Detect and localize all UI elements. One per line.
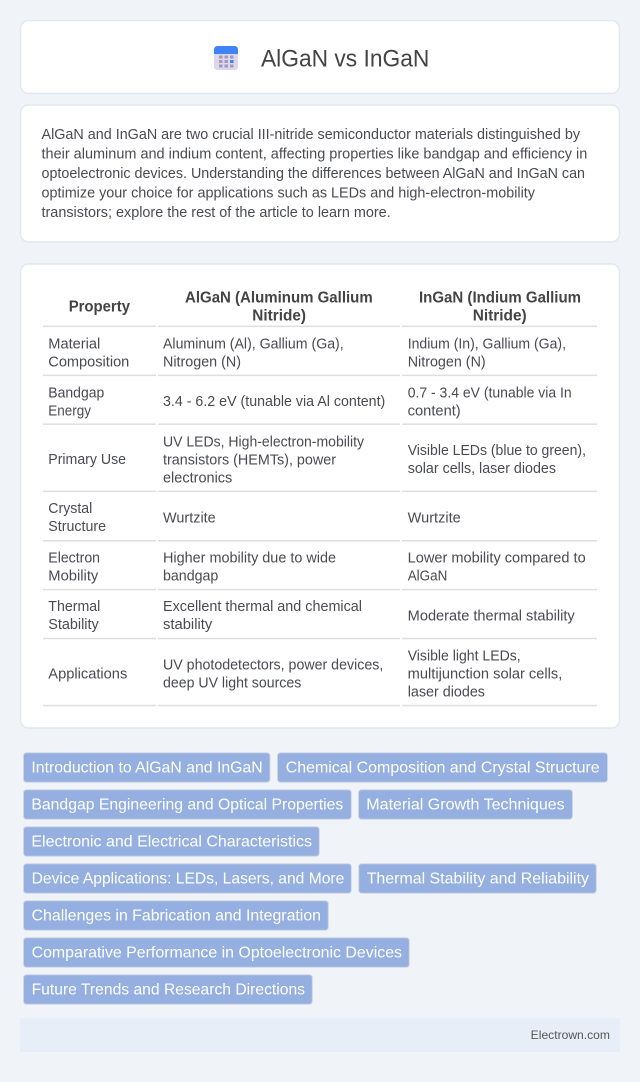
row: material composition: Nitrogen (N) xyxy=(408,354,486,370)
tag: comparative performance xyxy=(24,938,409,967)
row: electron mobility: Higher mobility due to wide xyxy=(163,550,336,566)
row: applications: Visible light LEDs, xyxy=(408,648,521,664)
text block: intro paragraph xyxy=(42,127,587,221)
row: thermal stability: Stability xyxy=(48,617,100,633)
table header row: Nitride) xyxy=(473,308,527,324)
table header row: AlGaN (Aluminum Gallium xyxy=(185,289,373,306)
row: thermal stability: stability xyxy=(163,617,213,633)
row: primary use: Primary Use xyxy=(48,452,126,468)
tag: device applications xyxy=(24,864,351,893)
tag: chemical composition xyxy=(278,753,608,782)
row: material composition: Indium (In), Gallium (Ga), xyxy=(408,336,566,352)
row: electron mobility: bandgap xyxy=(163,568,218,584)
tag: comparative performance: Comparative Performance in Optoelectronic Devices xyxy=(32,945,402,962)
row: thermal stability: Thermal xyxy=(48,599,100,615)
row: electron mobility xyxy=(48,550,586,584)
row: crystal structure: Wurtzite xyxy=(408,510,461,526)
row: applications: deep UV light sources xyxy=(163,675,301,691)
tag: bandgap engineering: Bandgap Engineering and Optical Properties xyxy=(31,797,343,814)
footer xyxy=(20,1018,620,1052)
row: primary use: transistors (HEMTs), power xyxy=(163,452,336,468)
row: crystal structure: Crystal xyxy=(48,501,92,517)
row: primary use xyxy=(48,435,586,486)
tag: chemical composition: Chemical Composition and Crystal Structure xyxy=(286,760,600,777)
tag: future trends xyxy=(24,975,312,1004)
row: applications: UV photodetectors, power devices, xyxy=(163,657,383,673)
row: thermal stability: Moderate thermal stability xyxy=(408,608,576,624)
row: material composition: Material xyxy=(48,336,100,352)
tag: introduction: Introduction to AlGaN and InGaN xyxy=(31,760,263,777)
tag: electronic characteristics: Electronic and Electrical Characteristics xyxy=(31,834,312,851)
panel: header xyxy=(20,20,620,94)
tag: material growth xyxy=(358,790,572,819)
row: bandgap energy xyxy=(48,385,572,419)
row: thermal stability xyxy=(48,599,576,633)
tag: introduction xyxy=(24,753,270,782)
tag: material growth: Material Growth Techniques xyxy=(366,797,565,814)
text block: intro paragraph: transistors; explore the rest of the article to learn more. xyxy=(42,205,391,221)
row: material composition xyxy=(48,336,566,370)
tag: thermal stability: Thermal Stability and Reliability xyxy=(367,871,589,888)
row: material composition: Aluminum (Al), Gallium (Ga), xyxy=(163,336,344,352)
text block: intro paragraph: optoelectronic devices. Understanding the differences between AlGaN and InGaN can xyxy=(42,166,585,182)
row: electron mobility: AlGaN xyxy=(408,568,447,584)
text block: intro paragraph: optimize your choice for applications such as LEDs and high-electron-mobility xyxy=(42,186,536,202)
row: electron mobility: Lower mobility compared to xyxy=(408,550,586,566)
panel: introduction xyxy=(20,105,620,242)
panel: comparison table xyxy=(20,264,620,728)
row: bandgap energy: 3.4 - 6.2 eV (tunable via Al content) xyxy=(163,394,385,410)
text block: intro paragraph: their aluminum and indium content, affecting properties like bandgap and efficiency in xyxy=(42,146,587,162)
tag: electronic characteristics xyxy=(24,827,319,856)
row: primary use: electronics xyxy=(163,470,232,486)
title: AlGaN vs InGaN xyxy=(261,46,429,73)
tag: fabrication challenges: Challenges in Fabrication and Integration xyxy=(32,908,321,925)
icon: calendar grid xyxy=(214,46,238,70)
row: crystal structure: Structure xyxy=(48,519,106,535)
tag: fabrication challenges xyxy=(24,901,328,930)
tag: bandgap engineering xyxy=(24,790,351,819)
row: thermal stability: Excellent thermal and chemical xyxy=(163,599,362,615)
row: primary use: Visible LEDs (blue to green), xyxy=(408,443,586,459)
table header row xyxy=(69,289,581,324)
row: electron mobility: Mobility xyxy=(48,568,99,584)
row: bandgap energy: 0.7 - 3.4 eV (tunable via In xyxy=(408,385,572,401)
row: material composition: Composition xyxy=(48,354,129,370)
tag: device applications: Device Applications: LEDs, Lasers, and More xyxy=(32,871,344,888)
row: material composition: Nitrogen (N) xyxy=(163,354,241,370)
row: electron mobility: Electron xyxy=(48,550,100,566)
panel: topic tags xyxy=(24,753,608,1004)
text block: intro paragraph: AlGaN and InGaN are two crucial III-nitride semiconductor materials distinguished by xyxy=(42,127,581,143)
row: crystal structure: Wurtzite xyxy=(163,510,216,526)
table header row: InGaN (Indium Gallium xyxy=(419,289,581,306)
row: crystal structure xyxy=(48,501,461,535)
table header row: Property xyxy=(69,298,130,316)
row: applications: multijunction solar cells, xyxy=(408,666,562,682)
row: primary use: UV LEDs, High-electron-mobility xyxy=(163,435,365,451)
row: applications: Applications xyxy=(48,666,127,682)
table header row: Nitride) xyxy=(252,308,306,324)
footer: Electrown.com xyxy=(531,1028,610,1042)
row: bandgap energy: content) xyxy=(408,403,461,419)
row: primary use: solar cells, laser diodes xyxy=(408,461,556,477)
row: applications: laser diodes xyxy=(408,684,485,700)
row: applications xyxy=(48,648,562,700)
row: bandgap energy: Bandgap xyxy=(48,385,104,401)
tag: future trends: Future Trends and Research Directions xyxy=(32,982,305,999)
tag: thermal stability xyxy=(359,864,596,893)
row: bandgap energy: Energy xyxy=(48,403,92,419)
